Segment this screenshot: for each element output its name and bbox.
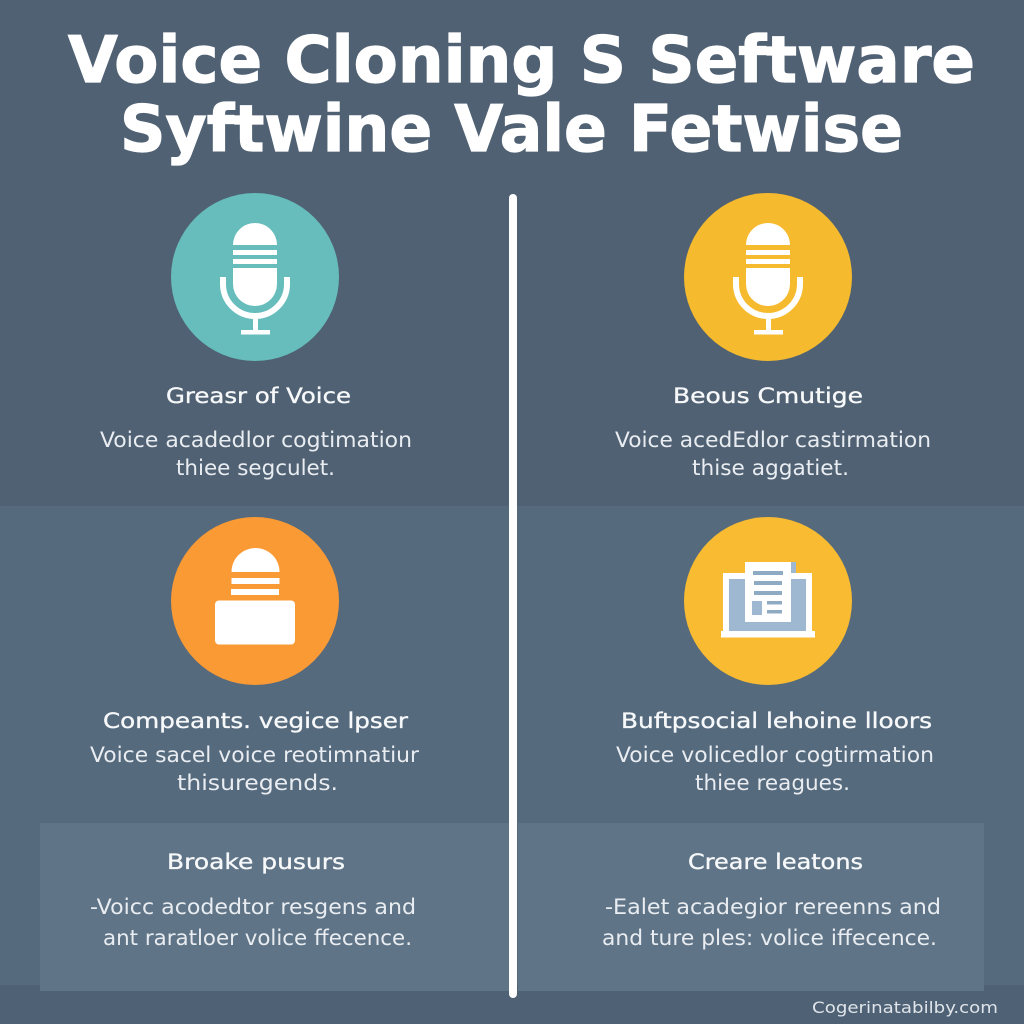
text block: bottom left: -Voicc acodedtor resgens and [90, 895, 416, 919]
text block: bottom right: and ture ples: volice iffecence. [602, 926, 937, 950]
text block: bottom right: -Ealet acadegior rereenns and [605, 895, 941, 919]
text block: middle right [616, 709, 934, 795]
text block: top left: Voice acadedlor cogtimation [100, 428, 412, 452]
text block: middle left [90, 709, 419, 795]
text block: bottom left: Broake pusurs [167, 850, 345, 874]
title: Syftwine Vale Fetwise [120, 93, 903, 167]
text block: top right: Voice acedEdlor castirmation [615, 428, 931, 452]
text block: top right [615, 384, 931, 480]
text block: middle right: thiee reagues. [695, 771, 850, 795]
text block: top left [100, 384, 412, 480]
text block: bottom right: Creare leatons [688, 850, 863, 874]
text block: middle right: Voice volicedlor cogtirmation [616, 743, 934, 767]
text block: top right: Beous Cmutige [673, 384, 863, 408]
text block: top left: thiee segculet. [176, 456, 335, 480]
text block: bottom left [90, 850, 416, 950]
text block: middle right: Buftpsocial lehoine lloors [621, 709, 932, 733]
icon: teal microphone [171, 193, 339, 361]
panel: bottom left [40, 823, 510, 991]
text block: middle left: thisuregends. [177, 771, 338, 795]
center divider [509, 194, 517, 998]
title: Voice Cloning S Seftware [68, 24, 975, 98]
text block: bottom right [602, 850, 941, 950]
text block: middle left: Voice sacel voice reotimnatiur [90, 743, 419, 767]
text block: top right: thise aggatiet. [692, 456, 849, 480]
text block: middle left: Compeants. vegice lpser [103, 709, 408, 733]
text block: bottom left: ant raratloer volice ffecence. [103, 926, 412, 950]
icon: yellow microphone [684, 193, 852, 361]
icon: orange microphone block [171, 517, 339, 685]
icon: yellow laptop document [684, 517, 852, 685]
text block: top left: Greasr of Voice [166, 384, 351, 408]
panel: bottom right [518, 823, 984, 991]
footer website: Cogerinatabilby.com [812, 998, 998, 1017]
title [68, 24, 975, 167]
